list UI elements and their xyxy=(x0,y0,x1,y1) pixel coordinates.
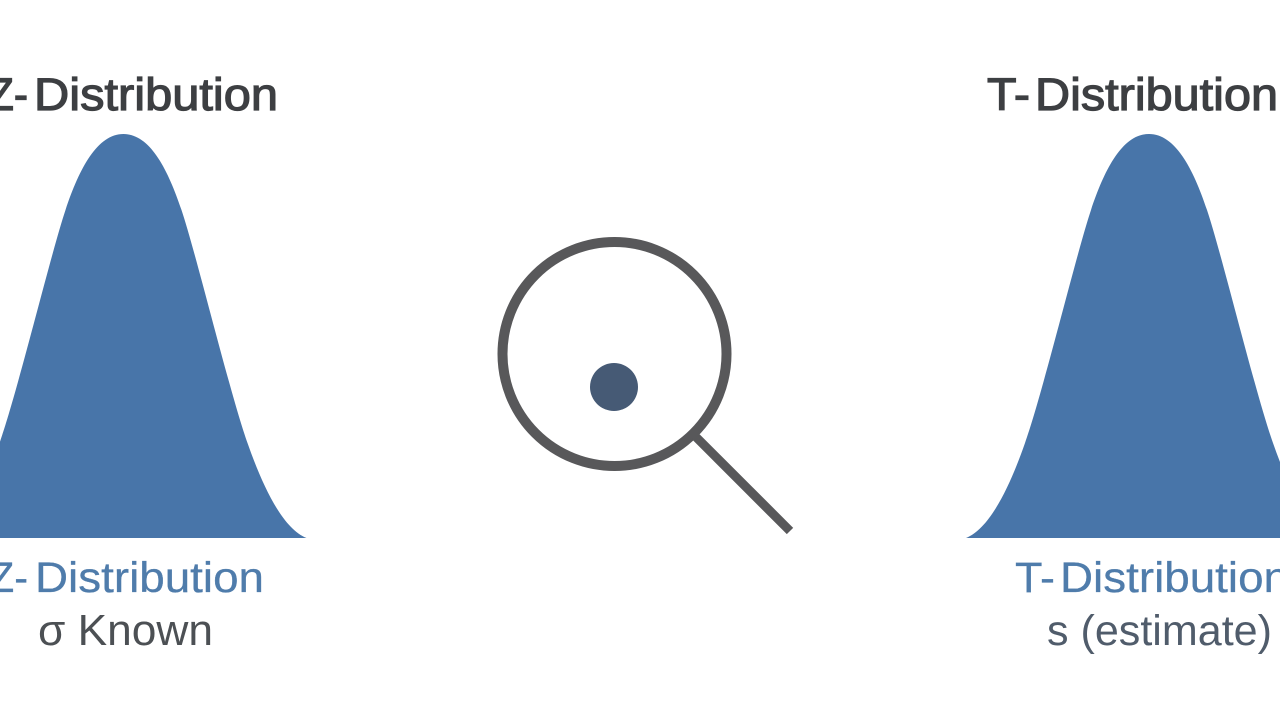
heading: T-Distribution: Distribution xyxy=(1035,69,1278,120)
label: Z-Distribution blue: Distribution xyxy=(35,554,264,602)
label: s estimate: s (estimate) xyxy=(1047,607,1272,655)
chart: T bell curve xyxy=(966,134,1280,538)
chart: Z bell curve xyxy=(0,134,306,538)
label: T-Distribution blue: T- xyxy=(1015,554,1055,602)
heading: T-Distribution: T- xyxy=(987,69,1030,120)
heading: Z-Distribution: Distribution xyxy=(34,69,278,120)
label: T-Distribution blue: Distribution xyxy=(1060,554,1280,602)
label: sigma known: σ Known xyxy=(38,606,213,655)
icon: data point xyxy=(590,363,638,411)
icon: magnifying glass xyxy=(502,242,790,531)
